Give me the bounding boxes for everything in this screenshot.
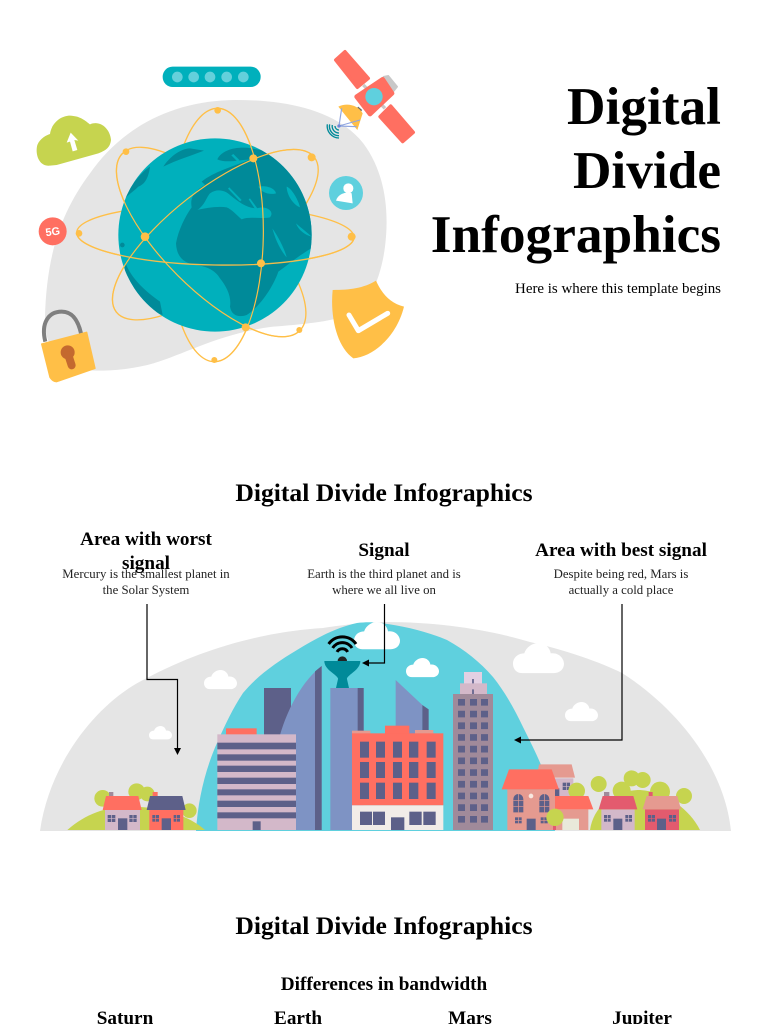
hill and trees left <box>67 783 205 830</box>
icon: antenna dish with wifi <box>324 637 360 688</box>
orbits in front of globe <box>76 108 354 364</box>
title: Divide <box>573 141 721 200</box>
callout: area with worst signal: Area with worst <box>80 529 213 550</box>
building: dark block <box>264 688 291 735</box>
building: blue wedge <box>396 680 429 734</box>
callout: signal <box>307 540 461 597</box>
house: small coral <box>546 796 593 830</box>
callout: signal: Signal <box>358 540 410 561</box>
title: Digital <box>567 77 721 136</box>
orbit nodes <box>76 107 356 363</box>
callout: area with worst signal: the Solar System <box>103 583 189 597</box>
house: pink <box>103 792 142 830</box>
hero illustration <box>39 67 387 371</box>
blue dome <box>196 622 555 831</box>
callout: area with worst signal: Mercury is the smallest planet in <box>62 567 230 581</box>
building: curved tower <box>280 666 322 830</box>
house: crimson wall <box>643 792 681 830</box>
callout: area with worst signal <box>62 529 230 597</box>
icon: cloud upload <box>37 116 111 166</box>
foreground illustration <box>42 107 404 382</box>
icon: 5G badge <box>39 217 67 245</box>
city illustration <box>40 622 731 831</box>
clouds <box>149 622 598 739</box>
house: crimson roof <box>599 792 637 830</box>
hill and trees right <box>590 770 700 830</box>
icon: 5G badge: 5G <box>45 225 61 239</box>
gray blob background <box>45 100 387 371</box>
callout: area with best signal: actually a cold place <box>569 583 674 597</box>
left buildings and houses <box>67 637 364 830</box>
section heading: Digital Divide Infographics <box>235 478 533 507</box>
building: red office <box>352 726 443 830</box>
callout: area with best signal: Despite being red, Mars is <box>554 567 688 581</box>
column labels <box>97 1008 672 1024</box>
house: red <box>147 792 186 830</box>
icon: shield <box>332 281 404 358</box>
section heading 2: Digital Divide Infographics <box>235 911 533 940</box>
globe <box>118 138 323 332</box>
callout: area with best signal: Area with best signal <box>535 540 707 561</box>
icon: satellite <box>327 52 413 142</box>
subtitle: Here is where this template begins <box>515 281 721 297</box>
house: big coral <box>502 769 559 830</box>
callout: signal: Earth is the third planet and is <box>307 567 461 581</box>
icon: signal pill <box>163 67 261 87</box>
right buildings and houses <box>352 672 700 830</box>
arrow: worst signal <box>147 604 181 755</box>
gray dome <box>40 622 731 831</box>
callout: area with best signal <box>535 540 707 597</box>
building: striped block <box>217 728 296 830</box>
arrow: signal <box>362 604 384 666</box>
callout: area with worst signal: signal <box>122 553 170 574</box>
subheading: bandwidth: Differences in bandwidth <box>281 974 488 995</box>
orbits behind globe <box>76 108 354 364</box>
building: tall blue tower <box>330 688 364 830</box>
title: Infographics <box>431 205 721 264</box>
callout: signal: where we all live on <box>332 583 436 597</box>
building: grey tower <box>453 672 493 830</box>
title <box>431 77 721 264</box>
arrow: best signal <box>514 604 622 744</box>
icon: padlock <box>42 312 95 382</box>
icon: user badge <box>329 176 363 210</box>
house: back <box>537 764 575 798</box>
